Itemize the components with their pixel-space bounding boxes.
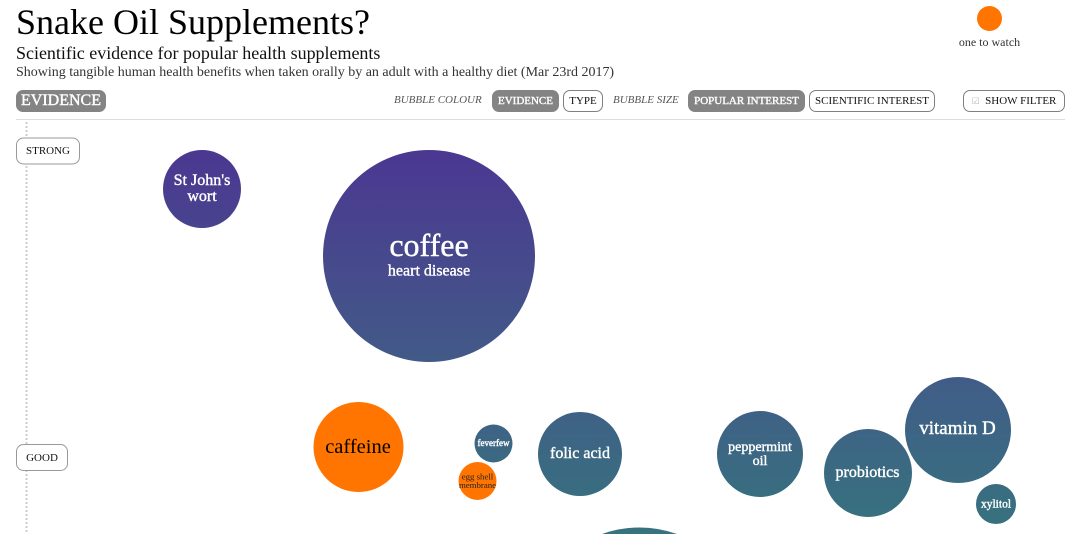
- axis label: good: [16, 444, 68, 470]
- bubble: xylitol: xylitol: [981, 498, 1011, 510]
- axis label: good: GOOD: [26, 452, 58, 464]
- axis title badge: evidence: EVIDENCE: [21, 92, 101, 109]
- bubble: peppermint oil: [717, 411, 803, 497]
- bubble: probiotics: [824, 429, 912, 517]
- bubble: St John's wort: St John's: [174, 172, 230, 189]
- label: bubble colour: BUBBLE COLOUR: [394, 94, 482, 106]
- bubble: egg shell membrane: [458, 462, 496, 500]
- description: Showing tangible human health benefits when taken orally by an adult with a healthy diet (Mar 23rd 2017): [16, 65, 614, 80]
- icon: orange legend dot: [977, 6, 1002, 30]
- bubble: vitamin D: vitamin D: [919, 418, 996, 439]
- button: scientific interest: [809, 90, 935, 112]
- bubble: partially visible bottom bubble: [602, 527, 677, 534]
- bubble: peppermint oil: oil: [753, 454, 767, 469]
- label: bubble size: BUBBLE SIZE: [613, 94, 679, 106]
- bubble: caffeine: caffeine: [325, 436, 391, 458]
- button: type: TYPE: [569, 95, 597, 107]
- bubble: St John's wort: wort: [187, 188, 217, 205]
- button: evidence colour: [492, 90, 559, 112]
- bubble: coffee: heart disease: [388, 262, 470, 280]
- button: evidence colour: EVIDENCE: [498, 95, 553, 107]
- subtitle: Scientific evidence for popular health supplements: [16, 43, 380, 63]
- button: show filter: ☑ SHOW FILTER: [972, 95, 1056, 107]
- button: scientific interest: SCIENTIFIC INTEREST: [815, 95, 929, 107]
- legend label: one to watch: [959, 35, 1020, 49]
- button: popular interest: POPULAR INTEREST: [694, 95, 799, 107]
- bubble: egg shell membrane: egg shell: [462, 472, 494, 482]
- bubble: coffee: coffee: [389, 227, 469, 263]
- button: show filter: [963, 90, 1065, 112]
- bubble: coffee: [323, 150, 535, 362]
- button: type: [563, 90, 603, 112]
- legend: one to watch: [959, 6, 1020, 49]
- axis title badge: evidence: [16, 90, 106, 112]
- title: Snake Oil Supplements?: [16, 2, 370, 42]
- bubble: caffeine: [314, 402, 404, 492]
- button: popular interest: [688, 90, 805, 112]
- bubble: peppermint oil: peppermint: [728, 440, 792, 455]
- axis label: strong: STRONG: [26, 145, 70, 157]
- bubble: feverfew: feverfew: [478, 438, 510, 448]
- bubble: vitamin D: [905, 377, 1011, 483]
- bubble: egg shell membrane: membrane: [459, 480, 496, 490]
- bubble: feverfew: [474, 424, 512, 462]
- bubble: xylitol: [976, 484, 1016, 524]
- bubble: St John's wort: [163, 150, 241, 228]
- bubble: folic acid: folic acid: [550, 445, 610, 462]
- axis label: strong: [16, 138, 80, 164]
- bubble: probiotics: probiotics: [836, 464, 900, 481]
- bubble: folic acid: [538, 412, 622, 496]
